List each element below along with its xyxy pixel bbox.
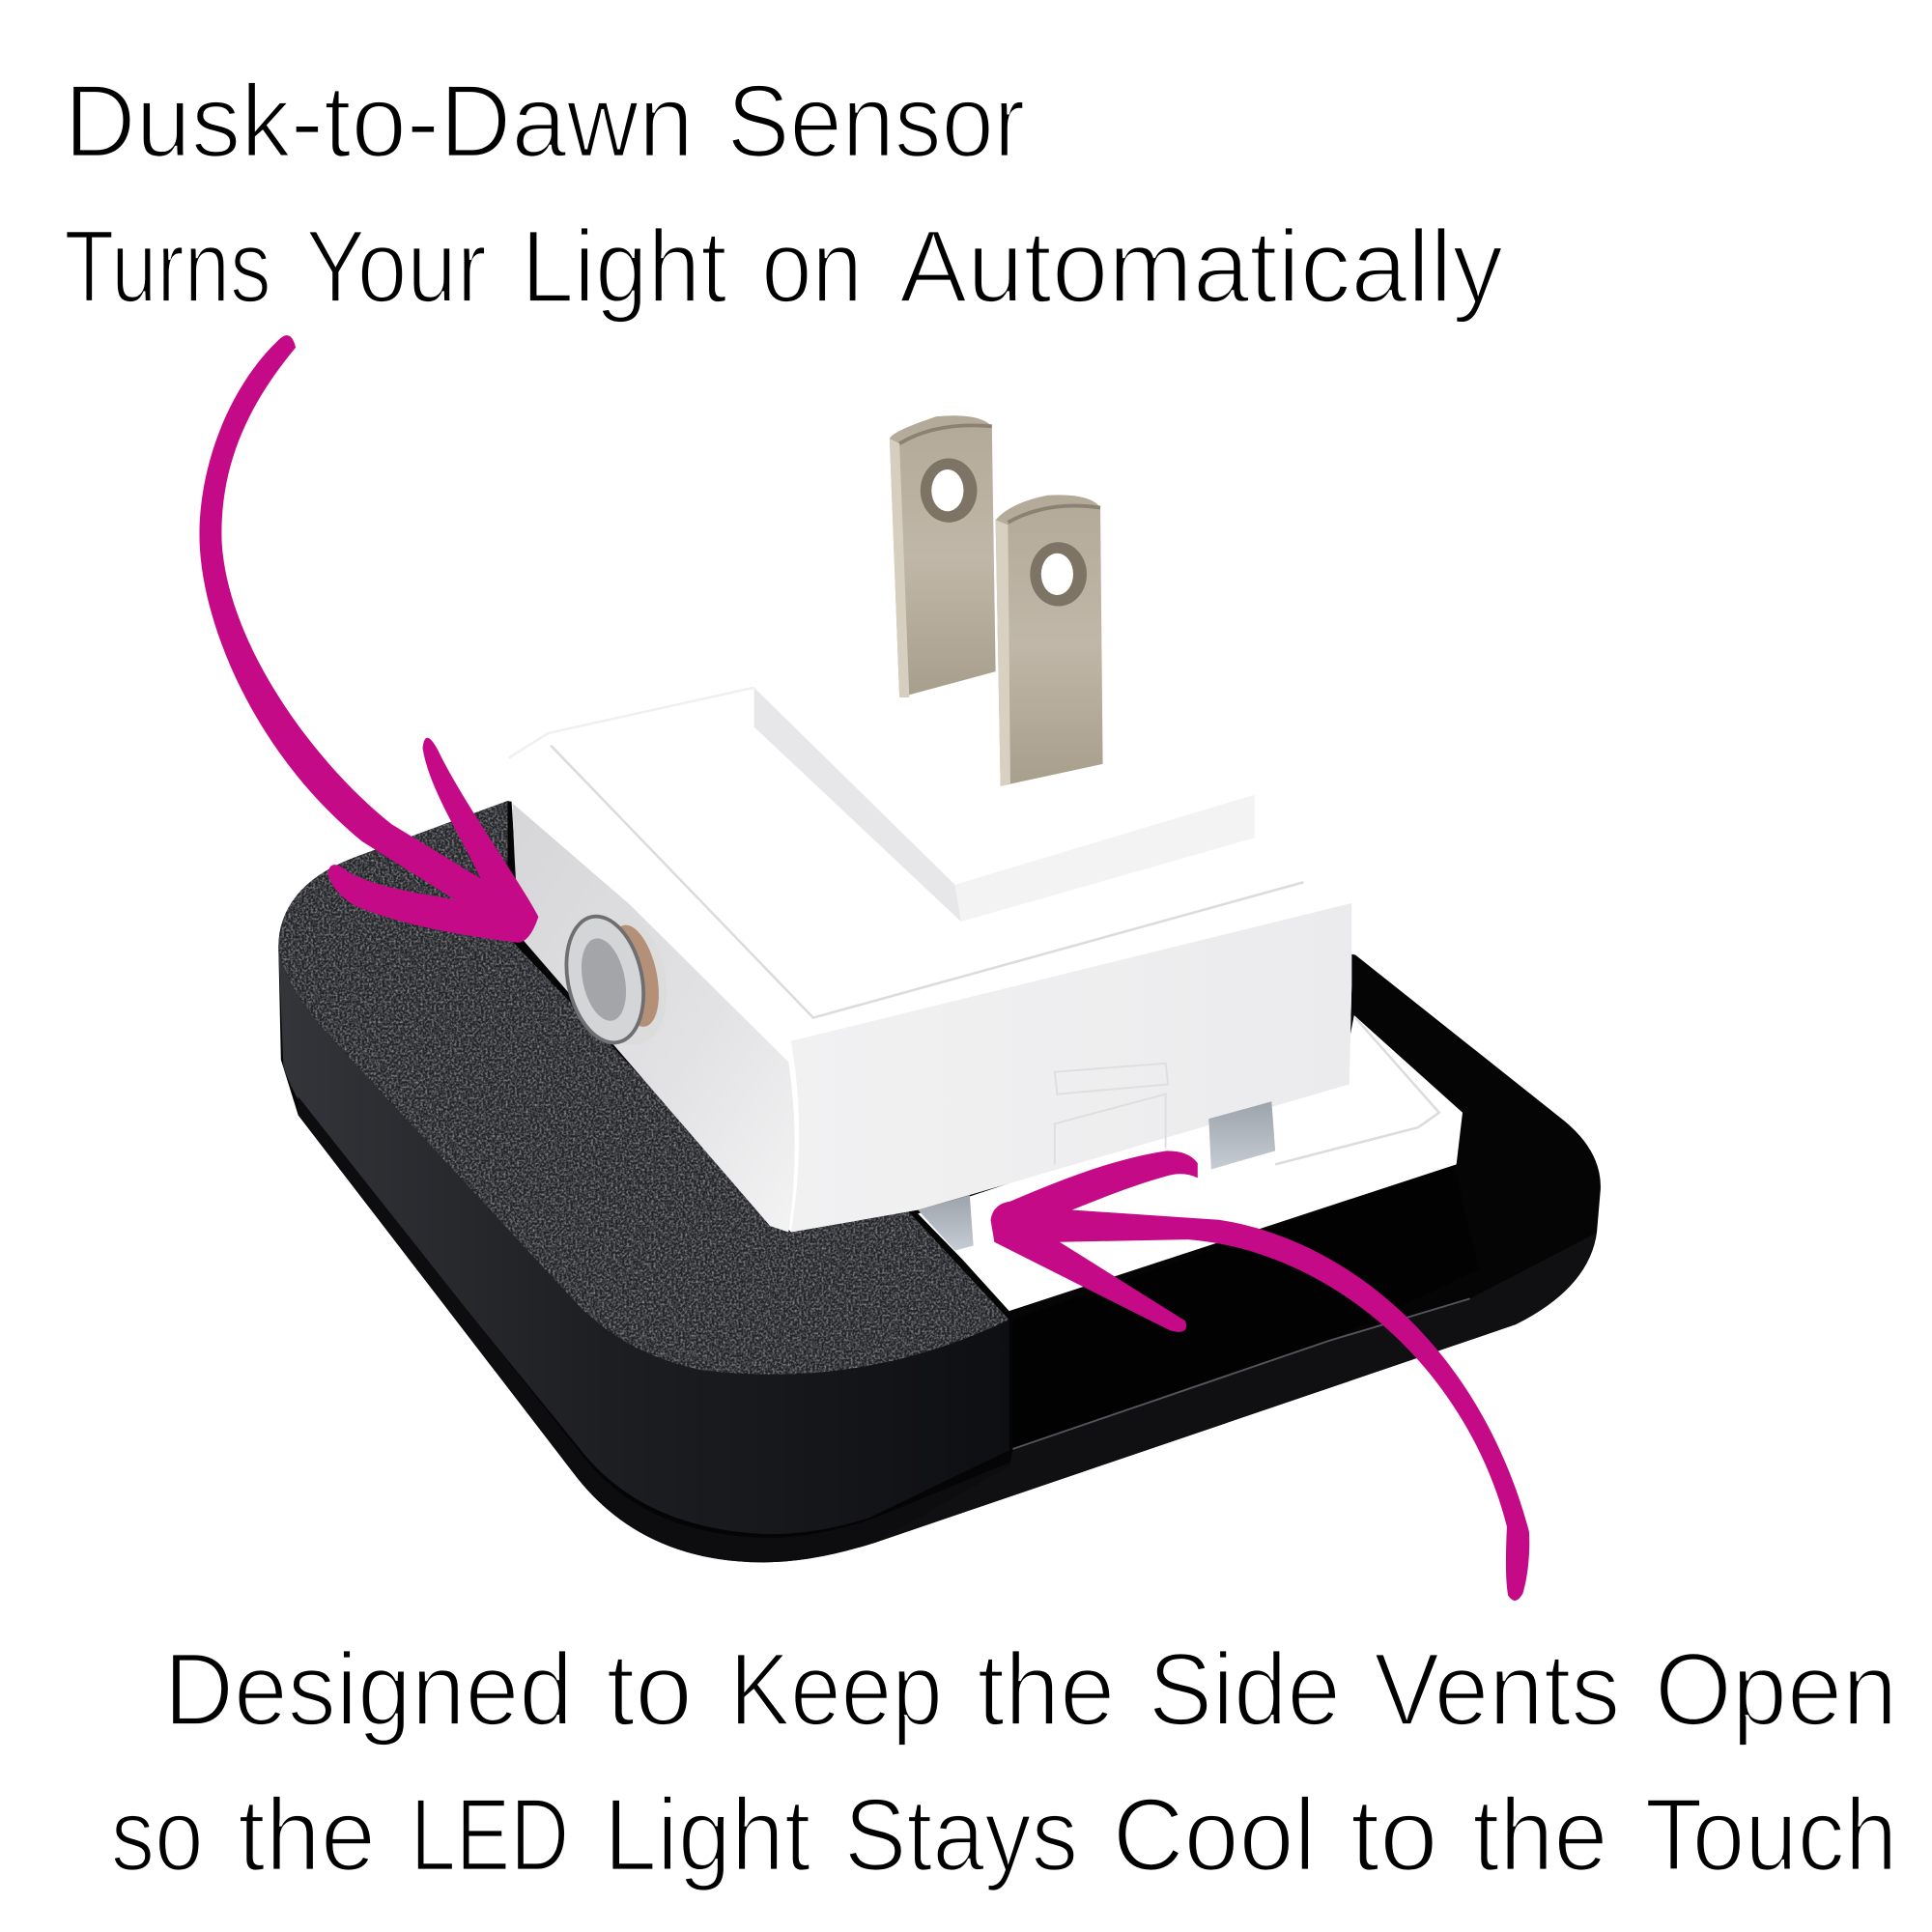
back prong (890, 415, 996, 697)
dusk-to-dawn sensor lens (555, 903, 678, 1053)
vent left (918, 1195, 974, 1251)
white vent tray (918, 1015, 1463, 1311)
housing front faint marks (1055, 1064, 1168, 1164)
caption: vents line 1: Designed (164, 1632, 573, 1747)
textured shelf top (271, 788, 1023, 1405)
heading: sensor line 1: Dusk-to-Dawn (64, 63, 694, 179)
caption: vents line 1: Side (1149, 1632, 1341, 1747)
heading: sensor line 2 (64, 209, 1504, 324)
caption: vents line 2: Light (604, 1776, 810, 1892)
heading: sensor line 1: Sensor (727, 63, 1025, 179)
caption: vents line 2: Cool (1113, 1776, 1316, 1892)
caption: vents line 1: Vents (1374, 1632, 1620, 1747)
caption: vents line 2: LED (411, 1776, 569, 1892)
heading: sensor line 2: Your (305, 208, 487, 324)
caption: vents line 2: to (1350, 1776, 1438, 1892)
product photo: shelf and night light (271, 415, 1601, 1562)
housing left face (513, 804, 795, 1233)
raised plug face (754, 640, 1254, 922)
plug housing (509, 688, 1351, 1251)
arrow: points to sensor (199, 335, 538, 943)
front prong (996, 495, 1103, 786)
caption: vents line 2: the (238, 1776, 376, 1892)
printed shelf side (278, 949, 1009, 1534)
caption: vents line 2: so (111, 1776, 203, 1892)
caption: vents line 2: Stays (844, 1776, 1078, 1892)
heading: sensor line 2: on (761, 208, 863, 324)
housing right face (791, 903, 1351, 1233)
caption: vents line 1: to (607, 1632, 693, 1747)
acrylic plate edge (875, 1234, 1596, 1543)
heading: sensor line 2: Automatically (899, 208, 1504, 324)
black base plate (278, 801, 1601, 1562)
arrow: points to vents (991, 1151, 1529, 1601)
caption: vents line 1 (164, 1632, 1897, 1747)
caption: vents line 2 (111, 1776, 1897, 1892)
caption: vents line 1: the (977, 1632, 1115, 1747)
heading: sensor line 1 (64, 63, 1025, 179)
housing body backing (509, 688, 1351, 1233)
recess under tray (1012, 1164, 1479, 1448)
caption: vents line 2: Touch (1645, 1776, 1897, 1892)
heading: sensor line 2: Light (522, 208, 727, 324)
vent right (1208, 1101, 1275, 1169)
caption: vents line 1: Open (1655, 1632, 1897, 1747)
caption: vents line 1: Keep (729, 1632, 943, 1747)
caption: vents line 2: the (1472, 1776, 1608, 1892)
lower acrylic layer (298, 1096, 1009, 1562)
heading: sensor line 2: Turns (64, 208, 271, 324)
